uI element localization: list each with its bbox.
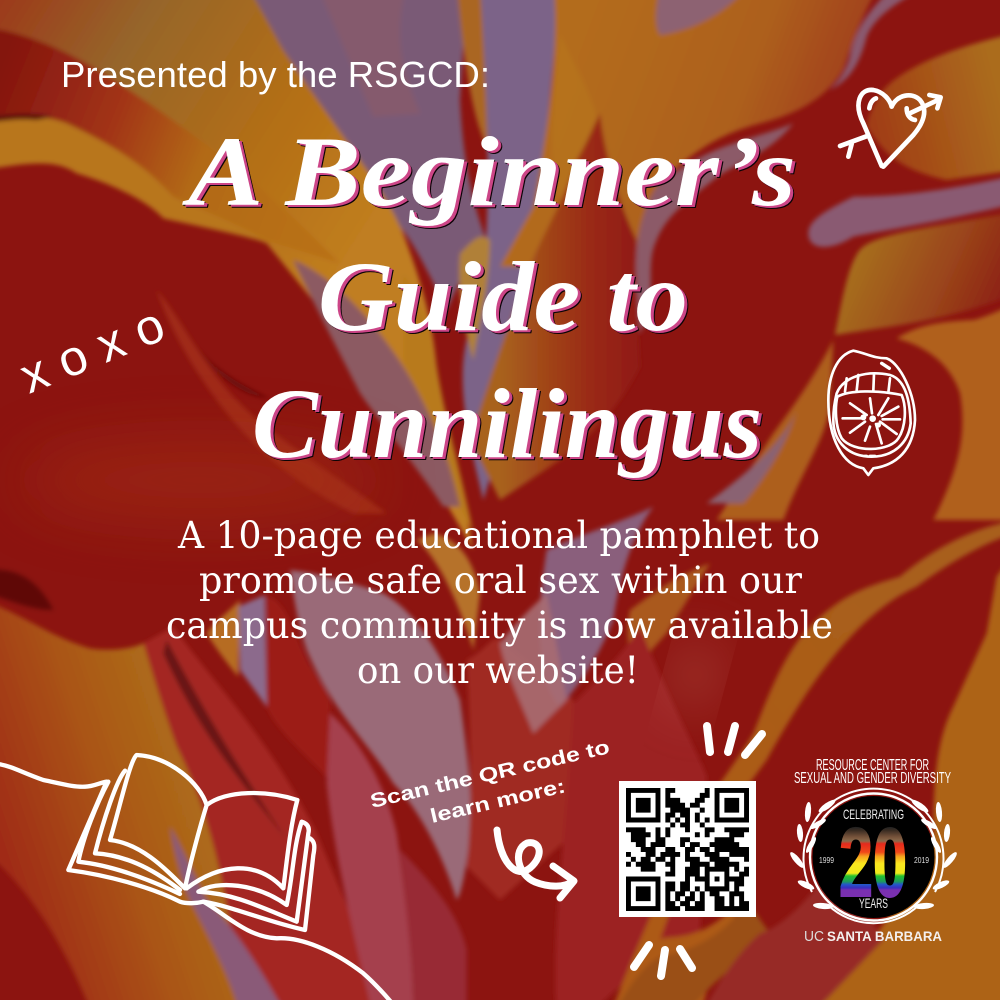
xoxo note: xoxo [12,296,172,404]
sparks above QR code [707,726,762,755]
icon: open book with ribbon line [0,755,395,1000]
presenter line: Presented by the RSGCD: [61,54,490,95]
title: A Beginner’s [181,116,796,227]
title: Cunnilingus [252,368,762,479]
logo: resource center 20 years badge: UC [804,928,824,945]
icon: heart with arrow [840,90,941,167]
description text: on our website! [357,649,639,692]
logo: resource center 20 years badge: YEARS [859,895,888,911]
logo: resource center 20 years badge: 20 [839,808,907,917]
wreath leaves [788,798,959,910]
description text: campus community is now available [166,604,833,647]
logo: resource center 20 years badge: 1999 [819,856,834,865]
scan the QR code label [368,736,612,828]
description text: A 10-page educational pamphlet to [177,514,820,557]
logo: resource center 20 years badge: SANTA BARBARA [827,928,942,944]
scan the QR code label: Scan the QR code to [368,736,612,813]
QR code [619,781,756,917]
description text: promote safe oral sex within our [199,559,802,602]
icon: curly arrow [497,830,574,898]
description text [166,514,833,692]
icon: open mouth [828,351,915,475]
logo: resource center 20 years badge [788,757,959,945]
logo: resource center 20 years badge: CELEBRATING [843,806,904,822]
title: Guide to [318,241,688,352]
logo: resource center 20 years badge: 2019 [914,856,929,865]
title [181,116,796,479]
scan the QR code label: learn more: [428,775,568,828]
sparks below QR code [634,945,692,976]
